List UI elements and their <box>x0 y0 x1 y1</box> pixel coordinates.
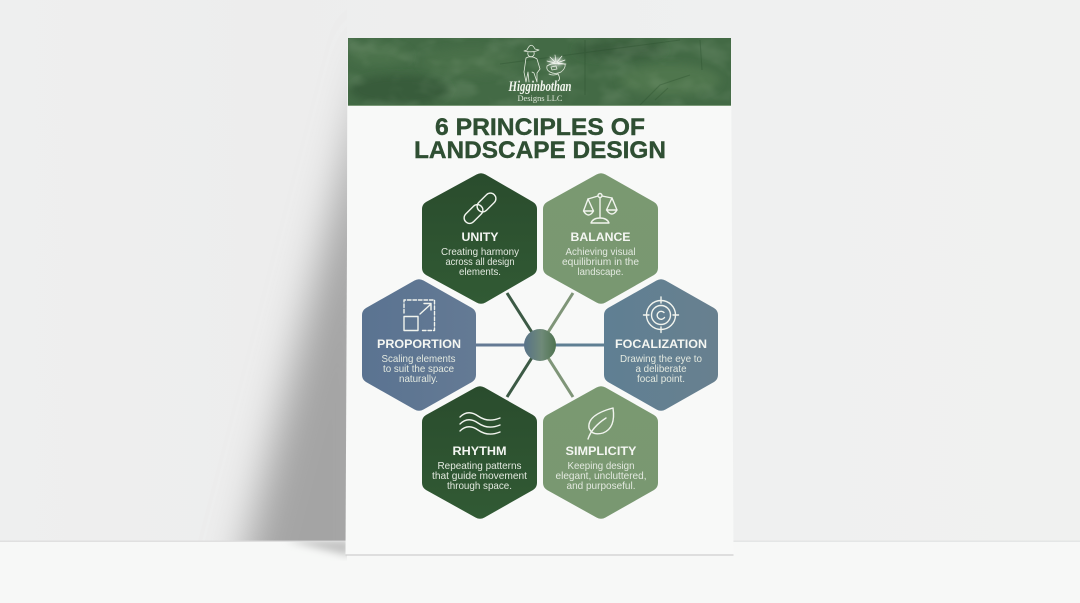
title: 6 PRINCIPLES OF <box>435 114 645 141</box>
heading: unity: UNITY <box>462 232 499 244</box>
description: rhythm: that guide movement <box>432 471 527 482</box>
description: rhythm: through space. <box>447 481 512 492</box>
floor shadow <box>292 542 347 558</box>
center hub <box>524 329 556 361</box>
icon: chain link <box>462 191 498 226</box>
description: proportion: naturally. <box>399 374 438 385</box>
description: balance: landscape. <box>578 267 624 278</box>
description: proportion: Scaling elements <box>382 354 456 365</box>
description: unity <box>441 247 520 278</box>
icon: scales <box>584 194 617 223</box>
description: unity: Creating harmony <box>441 247 520 258</box>
spoke connectors <box>475 293 605 397</box>
description: unity: elements. <box>459 267 501 278</box>
poster <box>346 38 734 556</box>
heading: simplicity: SIMPLICITY <box>566 446 637 458</box>
title <box>414 114 666 164</box>
logo figure and flower sketch <box>524 45 565 82</box>
banner <box>348 38 731 106</box>
logo: Higginbothan Designs LLC <box>508 45 572 103</box>
description: proportion: to suit the space <box>383 364 454 375</box>
logo subtitle: Designs LLC <box>518 93 563 103</box>
description: focalization <box>620 354 702 385</box>
hexagon: balance <box>543 173 658 304</box>
description: simplicity: elegant, uncluttered, <box>556 471 646 482</box>
hexagon: simplicity <box>543 386 658 519</box>
logo sparkle <box>549 58 563 66</box>
description: balance: equilibrium in the <box>562 257 639 268</box>
hexagon: focalization <box>604 279 718 411</box>
heading: rhythm: RHYTHM <box>452 446 506 458</box>
description: unity: across all design <box>446 257 514 268</box>
title: LANDSCAPE DESIGN <box>414 137 666 164</box>
description: balance: Achieving visual <box>566 247 636 258</box>
description: focalization: Drawing the eye to <box>620 354 702 365</box>
background floor <box>0 542 1080 603</box>
heading: balance: BALANCE <box>570 232 631 244</box>
poster sheet <box>346 38 734 555</box>
hexagon: proportion <box>362 279 476 411</box>
description: balance <box>562 247 639 278</box>
icon: scale arrow <box>404 300 434 330</box>
logo rays <box>547 55 566 64</box>
description: rhythm: Repeating patterns <box>438 461 522 472</box>
description: simplicity: Keeping design <box>568 461 634 472</box>
description: focalization: a deliberate <box>636 364 687 375</box>
logo wordmark: Higginbothan <box>508 79 572 95</box>
heading: focalization: FOCALIZATION <box>615 339 707 351</box>
wall shadow left of poster <box>224 80 347 541</box>
hexagon: unity <box>422 173 537 304</box>
icon: waves <box>460 413 500 434</box>
heading: proportion: PROPORTION <box>377 339 461 351</box>
icon: target <box>644 297 678 332</box>
description: focalization: focal point. <box>637 374 685 385</box>
description: proportion <box>382 354 456 385</box>
description: simplicity: and purposeful. <box>566 481 636 492</box>
description: rhythm <box>432 461 527 492</box>
icon: leaf <box>588 408 614 439</box>
hexagon: rhythm <box>422 386 537 519</box>
description: simplicity <box>556 461 646 492</box>
